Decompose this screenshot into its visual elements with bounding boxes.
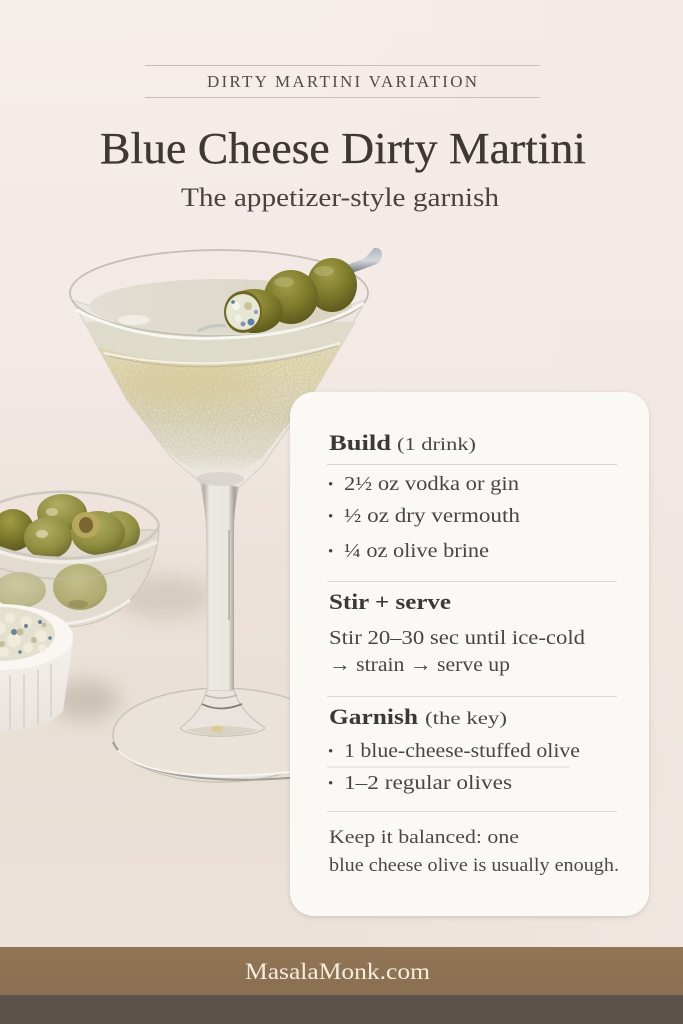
balance tip: Keep it balanced: one: [329, 827, 519, 848]
section: stir and serve: → strain → serve up: [329, 654, 510, 676]
bowl of olives: [0, 492, 215, 627]
cocktail in bowl: [72, 279, 366, 487]
section: build: Build: [329, 430, 391, 455]
balance tip: blue cheese olive is usually enough.: [329, 855, 619, 876]
section: build: •: [328, 544, 333, 560]
section: garnish: (the key): [425, 708, 507, 729]
martini glass: [70, 248, 382, 782]
garnish pick with olives: [198, 248, 382, 333]
section: stir and serve: [329, 589, 585, 676]
section: stir and serve: Stir + serve: [329, 589, 451, 614]
section: build: ½ oz dry vermouth: [344, 505, 520, 527]
section: build: •: [328, 477, 333, 493]
section: garnish: [327, 704, 580, 794]
section: garnish: •: [328, 744, 333, 760]
glass rim: [70, 250, 368, 338]
section: garnish: 1 blue-cheese-stuffed olive: [344, 740, 580, 762]
section: build: 2½ oz vodka or gin: [344, 473, 519, 495]
section: build: [327, 430, 617, 562]
footer website: MasalaMonk.com: [245, 959, 430, 985]
section: garnish: •: [328, 776, 333, 792]
section: garnish: 1–2 regular olives: [344, 772, 512, 794]
balance tip: [329, 827, 619, 876]
footer band: [0, 947, 683, 1024]
eyebrow header: DIRTY MARTINI VARIATION: [207, 72, 477, 91]
section: build: ¼ oz olive brine: [344, 540, 489, 562]
subtitle: The appetizer-style garnish: [181, 183, 499, 212]
blue cheese filling: [224, 291, 262, 333]
section: build: (1 drink): [397, 434, 476, 455]
section: garnish: Garnish: [329, 704, 418, 729]
glass stem: [199, 478, 241, 690]
glass foot: [113, 688, 329, 782]
section: build: •: [328, 509, 333, 525]
title: Blue Cheese Dirty Martini: [100, 124, 586, 173]
recipe card: [290, 392, 649, 916]
section: stir and serve: Stir 20–30 sec until ice-cold: [329, 627, 585, 649]
ramekin of blue cheese: [0, 604, 120, 732]
